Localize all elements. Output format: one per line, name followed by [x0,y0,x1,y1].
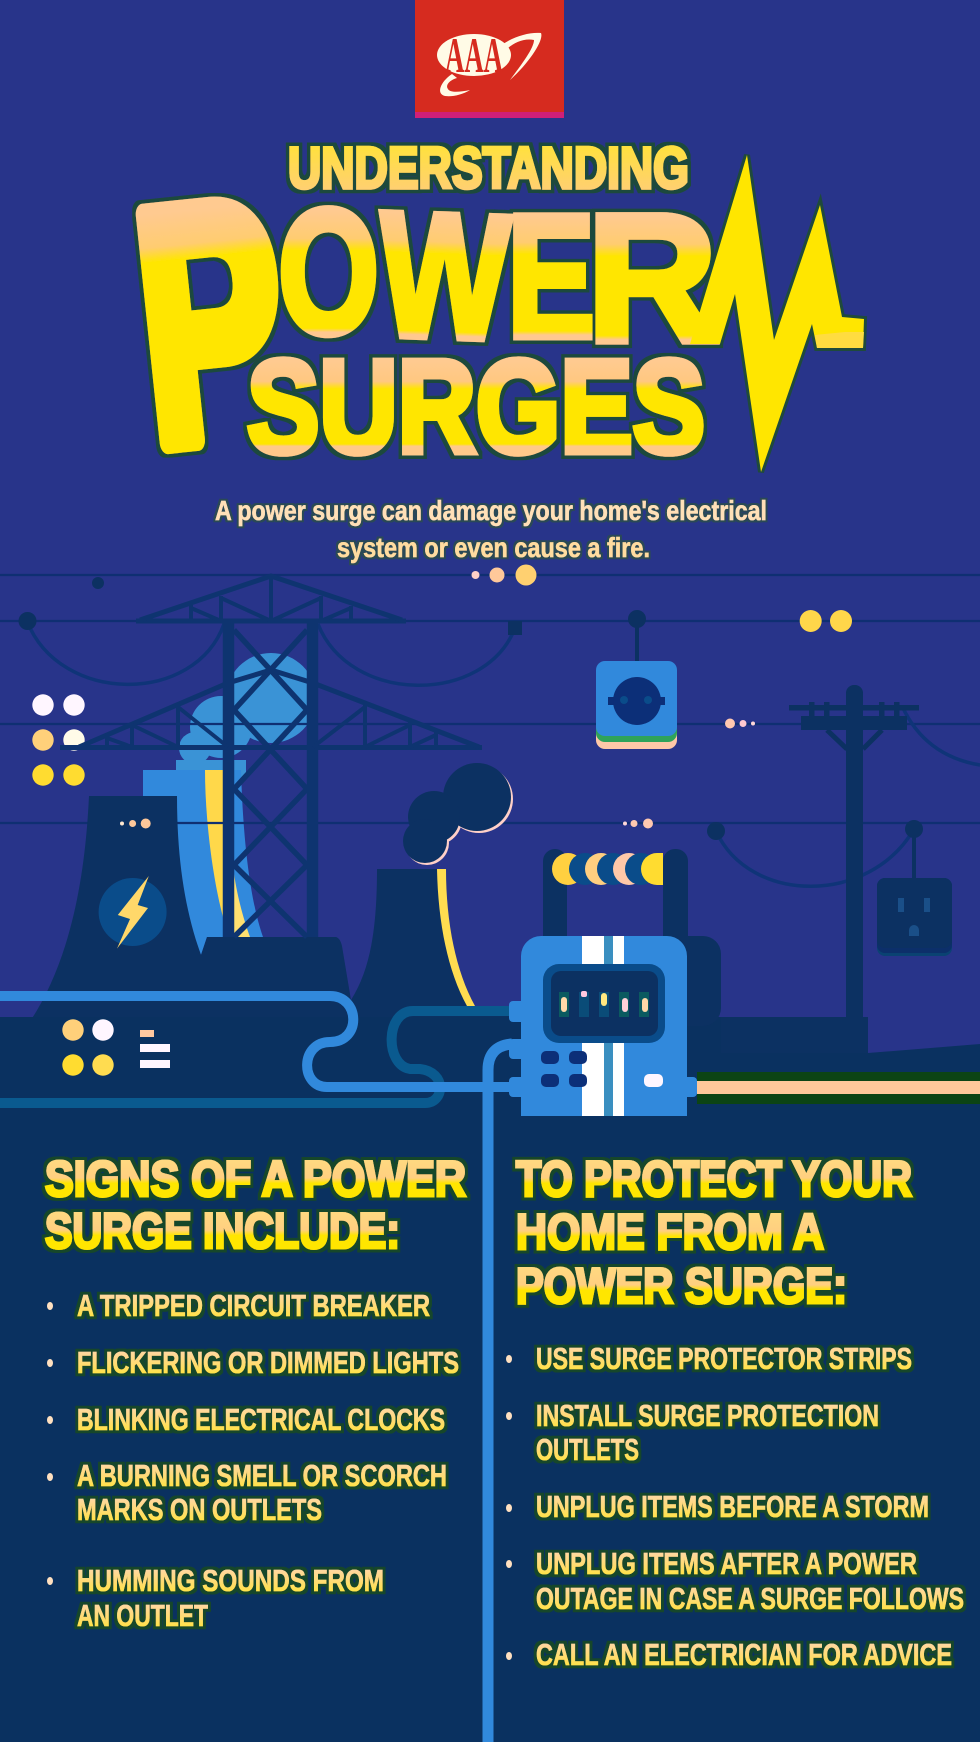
band dots and bars [62,1019,170,1076]
power band stripe [697,1072,980,1104]
subtitle: system or even cause a fire. [337,532,650,563]
heading: to protect your home [516,1151,912,1314]
list: signs of a power surge: FLICKERING OR DIMMED LIGHTS [77,1345,459,1380]
bullets: left list [47,1302,53,1585]
title: Power: E [507,177,595,374]
title: Power: O [278,173,379,372]
list: signs of a power surge [77,1288,459,1633]
heading: signs of a power surge: SURGE INCLUDE: [45,1203,400,1259]
electric meter [509,936,697,1116]
power lines [0,575,980,823]
list: signs of a power surge: AN OUTLET [77,1598,208,1633]
list: to protect your home [536,1341,964,1672]
meter display [543,964,665,1043]
small dots on left tower [120,818,151,828]
heading: signs of a power surge [45,1151,466,1259]
heading: to protect your home: POWER SURGE: [516,1258,847,1314]
heading: to protect your home: HOME FROM A [516,1204,824,1260]
utility pole [789,685,919,1025]
subtitle: A power surge can damage your home's electrical [215,495,767,526]
title: Surges: SURGES [247,333,705,480]
title: Power [122,132,717,515]
dots top centre [472,564,536,586]
dark ground [0,1017,980,1742]
dots above coil [623,818,653,828]
list: signs of a power surge: HUMMING SOUNDS FROM [77,1563,384,1598]
cooling tower left [31,796,540,1020]
subtitle [215,495,767,563]
heading: signs of a power surge: SIGNS OF A POWER [45,1151,466,1207]
dot grid: left [32,694,85,786]
blue steam cloud and cooling tower [143,653,316,955]
title: lightning tail of Power [690,155,864,472]
list: to protect your home: OUTLETS [536,1432,639,1467]
list: signs of a power surge: MARKS ON OUTLETS [77,1492,322,1527]
list: signs of a power surge: BLINKING ELECTRICAL CLOCKS [77,1402,445,1437]
pole outlet [707,820,952,956]
list: signs of a power surge: A TRIPPED CIRCUIT BREAKER [77,1288,430,1323]
title: lightning bolt [690,155,864,472]
title: Power: R [587,177,717,380]
arch and coils behind meter [543,849,868,1053]
pipe: light blue [0,996,512,1087]
yellow smoke stream [437,869,475,1006]
bullets: right list [506,1355,512,1660]
lightning badge on tower [99,876,167,949]
pipe: vertical column divider [488,1044,512,1742]
title: Power: W [376,174,513,378]
logo: AAA [415,0,564,118]
title: Understanding: UNDERSTANDING [288,136,689,201]
list: signs of a power surge: A BURNING SMELL OR SCORCH [77,1458,447,1493]
hanging wires [18,577,980,886]
logo: AAA: AAA [445,27,503,83]
title: Power: P [122,132,301,515]
smoke cloud [403,763,513,865]
blue wall outlet [596,610,677,749]
pipe: dark blue [0,1011,512,1103]
dots top right [800,610,852,632]
transmission tower [60,576,482,937]
dots beside outlet [725,718,755,728]
